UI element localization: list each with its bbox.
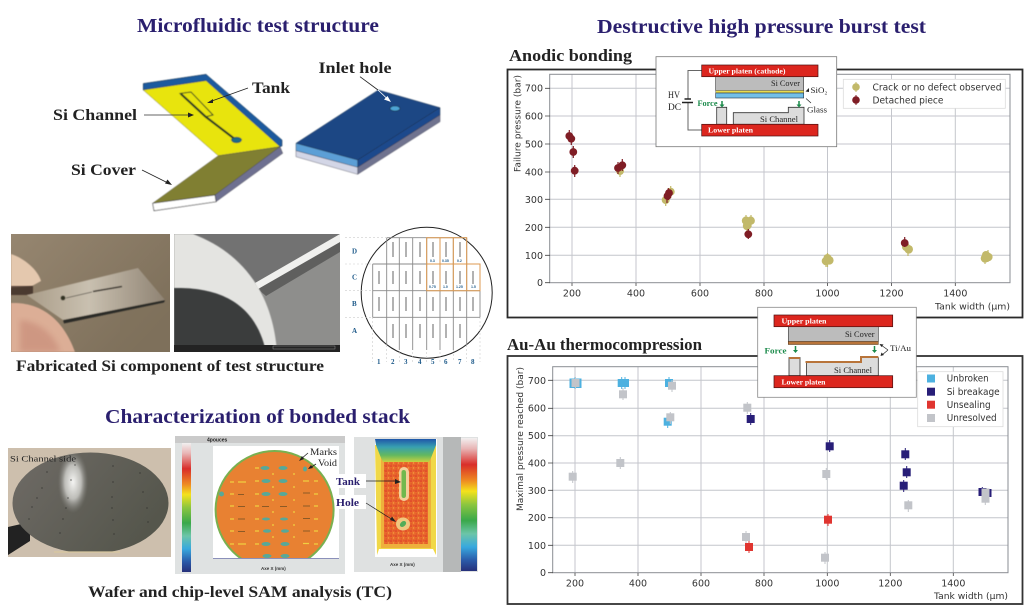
- chart: Au-Au maximal pressure: [508, 356, 1022, 604]
- chart: Au-Au maximal pressure: Tank width (μm): [933, 592, 1008, 602]
- inset: thermocompression schematic: Si Cover: [845, 330, 875, 339]
- diagram: wafer layout map: 2: [391, 358, 395, 366]
- chart: wafer-level SAM scan: [175, 436, 345, 574]
- heading: Anodic bonding: Anodic bonding: [509, 46, 633, 65]
- chart: anodic bonding failure pressure: 700: [525, 84, 543, 94]
- chart: Au-Au maximal pressure: 1000: [815, 578, 839, 590]
- label: Tank: [207, 80, 290, 103]
- diagram: wafer layout map: B: [352, 300, 357, 308]
- label: Si Channel: [53, 107, 194, 124]
- photo: wafer Si Channel side: Si Channel side: [10, 454, 76, 464]
- inset: anodic bonding schematic: Glass: [807, 106, 827, 114]
- chart: Au-Au maximal pressure: 800: [755, 578, 773, 590]
- title: Characterization of bonded stack: Characterization of bonded stack: [105, 406, 411, 428]
- diagram: wafer layout map: [345, 227, 492, 366]
- label: Si Cover: Si Cover: [71, 162, 136, 179]
- inset: anodic bonding schematic: SiO₂: [810, 86, 828, 95]
- diagram: wafer layout map: 6: [444, 358, 448, 366]
- chart: Au-Au maximal pressure: 200: [566, 578, 584, 590]
- chart: anodic bonding failure pressure: Tank width (μm): [934, 302, 1010, 312]
- chart: Au-Au maximal pressure: 100: [528, 541, 546, 552]
- inset: anodic bonding schematic: HV: [668, 90, 680, 100]
- inset: thermocompression schematic: Lower platen: [782, 378, 826, 386]
- diagram: wafer layout map: 7: [458, 358, 462, 366]
- series: unresolved: [569, 377, 985, 564]
- inset: thermocompression schematic: Ti/Au: [890, 344, 911, 353]
- inset: anodic bonding schematic: DC: [668, 102, 681, 112]
- chart: chip-level SAM scan: [354, 437, 478, 572]
- chart: wafer-level SAM scan: 4pouces: [207, 438, 228, 444]
- chart: anodic bonding failure pressure: 400: [525, 168, 543, 178]
- legend: Detached piece: [872, 96, 944, 106]
- label: Marks: [299, 448, 337, 461]
- chart: anodic bonding failure pressure: 600: [691, 288, 709, 300]
- diagram: wafer layout map: 0.35: [442, 259, 449, 263]
- chart: anodic bonding failure pressure: 500: [525, 140, 543, 150]
- title: Microfluidic test structure: Microfluidic test structure: [137, 15, 379, 37]
- chart: Au-Au maximal pressure: 600: [528, 404, 546, 414]
- photo: wafer Si Channel side: [8, 448, 171, 557]
- legend: Unresolved: [947, 413, 997, 424]
- chart: Au-Au maximal pressure: 300: [528, 486, 546, 497]
- inset: anodic bonding schematic: Si Channel: [760, 115, 799, 124]
- label: Tank: Tank: [336, 477, 360, 488]
- chart: Au-Au maximal pressure: 1200: [878, 578, 902, 590]
- legend: [843, 79, 1005, 108]
- inset: anodic bonding schematic: Lower platen: [708, 126, 754, 134]
- label: Si Cover: [71, 162, 172, 185]
- chart: anodic bonding failure pressure: 1400: [943, 288, 967, 300]
- chart: anodic bonding failure pressure: 400: [627, 288, 645, 300]
- inset: anodic bonding schematic: Force: [698, 99, 718, 108]
- diagram: wafer layout map: 1.25: [456, 285, 463, 289]
- inset: anodic bonding schematic: [656, 57, 837, 147]
- chart: anodic bonding failure pressure: 200: [525, 223, 543, 234]
- chart: Au-Au maximal pressure: 500: [528, 431, 546, 442]
- series: unbroken: [570, 377, 673, 428]
- label: Void: [308, 459, 337, 469]
- legend: Unsealing: [947, 400, 991, 411]
- label: Void: Void: [318, 459, 337, 469]
- chart: anodic bonding failure pressure: 200: [563, 288, 581, 300]
- series: crack or no defect: [616, 165, 993, 267]
- chart: anodic bonding failure pressure: 300: [525, 195, 543, 206]
- chart: anodic bonding failure pressure: [508, 70, 1022, 318]
- series: detached piece: [565, 130, 909, 247]
- series: Si breakage: [747, 413, 992, 497]
- diagram: wafer layout map: 0.75: [429, 285, 436, 289]
- label: Hole: [335, 495, 396, 522]
- chart: Au-Au maximal pressure: 200: [528, 513, 546, 524]
- legend: Crack or no defect observed: [872, 82, 1002, 94]
- caption: SAM analysis: Wafer and chip-level SAM analysis (TC): [88, 584, 392, 601]
- inset: thermocompression schematic: Upper platen: [782, 316, 827, 326]
- chart: anodic bonding failure pressure: 800: [755, 288, 773, 300]
- label: Inlet hole: [318, 60, 392, 102]
- chart: Au-Au maximal pressure: 1400: [941, 578, 965, 590]
- legend: Unbroken: [947, 374, 989, 385]
- label: Inlet hole: Inlet hole: [318, 60, 392, 77]
- series: unsealing: [745, 514, 832, 553]
- chart: anodic bonding failure pressure: 1000: [815, 288, 840, 300]
- diagram: wafer layout map: 0.3: [430, 259, 435, 263]
- chart: Au-Au maximal pressure: 700: [528, 376, 546, 387]
- diagram: wafer layout map: 4: [418, 358, 422, 366]
- inset: anodic bonding schematic: Upper platen (cathode): [708, 66, 786, 76]
- inset: anodic bonding schematic: Si Cover: [771, 79, 800, 88]
- photo: SEM micrograph: [174, 234, 340, 352]
- inset: thermocompression schematic: Si Channel: [834, 366, 873, 375]
- chart: wafer-level SAM scan: Axe X (mm): [261, 566, 286, 571]
- diagram: wafer layout map: A: [352, 327, 357, 335]
- chart: chip-level SAM scan: Axe X (mm): [390, 562, 415, 567]
- diagram: exploded Si channel and Si cover: [143, 74, 440, 211]
- chart: anodic bonding failure pressure: Failure pressure (bar): [514, 75, 524, 172]
- label: Marks: Marks: [310, 448, 337, 458]
- diagram: wafer layout map: 5: [431, 358, 435, 366]
- diagram: wafer layout map: 1: [377, 358, 381, 366]
- diagram: wafer layout map: 1.0: [443, 285, 448, 289]
- chart: Au-Au maximal pressure: 0: [540, 568, 546, 579]
- inset: thermocompression schematic: Force: [764, 346, 787, 356]
- chart: anodic bonding failure pressure: 0: [537, 278, 543, 289]
- chart: anodic bonding failure pressure: 1200: [879, 288, 904, 300]
- legend: [918, 372, 1003, 427]
- inset: thermocompression schematic: [758, 307, 916, 397]
- series: unresolved at 1500: [742, 488, 990, 562]
- photo: hand holding Si chip: [11, 234, 170, 352]
- chart: anodic bonding failure pressure: 600: [525, 112, 543, 122]
- diagram: wafer layout map: 0.2: [457, 259, 462, 263]
- heading: Au-Au thermocompression: Au-Au thermocompression: [507, 335, 702, 354]
- chart: Au-Au maximal pressure: Maximal pressure reached (bar): [516, 367, 526, 511]
- title: Destructive high pressure burst test: Destructive high pressure burst test: [597, 16, 926, 38]
- chart: anodic bonding failure pressure: 100: [525, 251, 543, 262]
- label: Si Channel: Si Channel: [53, 107, 138, 124]
- chart: Au-Au maximal pressure: 400: [528, 458, 546, 470]
- label: Tank: Tank: [252, 80, 290, 97]
- chart: Au-Au maximal pressure: 400: [629, 578, 647, 590]
- label: Tank: [335, 474, 401, 488]
- diagram: wafer layout map: 1.5: [471, 285, 476, 289]
- diagram: wafer layout map: 3: [404, 358, 408, 366]
- diagram: wafer layout map: 8: [471, 358, 475, 366]
- caption: Fabricated Si component: Fabricated Si component of test structure: [16, 358, 324, 375]
- diagram: wafer layout map: C: [352, 274, 357, 282]
- legend: Si breakage: [947, 387, 1000, 398]
- label: Hole: Hole: [336, 498, 359, 509]
- chart: Au-Au maximal pressure: 600: [692, 578, 710, 590]
- diagram: wafer layout map: D: [352, 248, 357, 256]
